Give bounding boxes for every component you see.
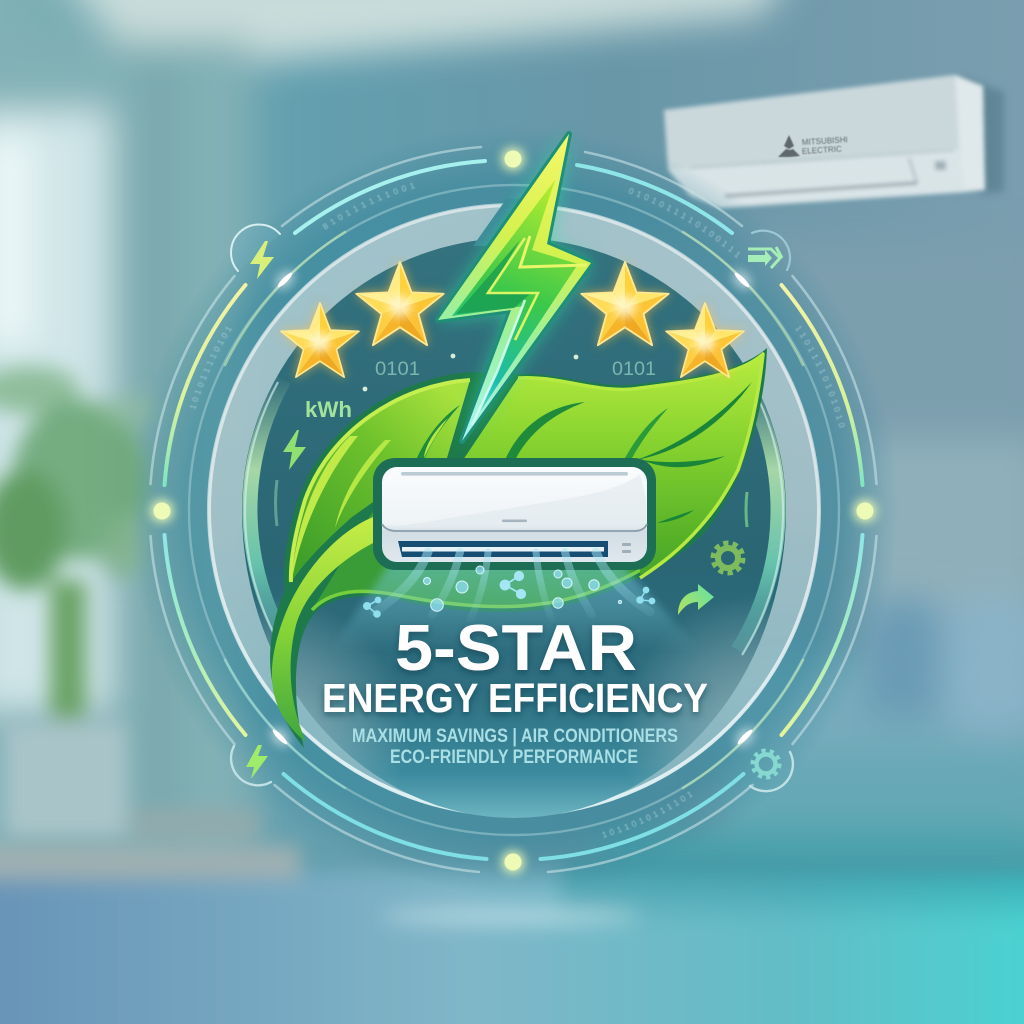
icon: curved arrow — [678, 584, 714, 615]
air vent — [398, 541, 608, 557]
lightning bolt — [438, 134, 591, 441]
HUD outer arcs — [150, 147, 876, 872]
badge: arrows top right — [748, 231, 790, 270]
icon: molecule center — [500, 572, 525, 598]
outer thin arcs — [150, 147, 876, 872]
circular tint behind HUD rings — [129, 125, 899, 895]
binary labels — [375, 359, 656, 380]
five-point gold stars — [281, 262, 744, 377]
notch in glass ring behind bolt — [473, 198, 557, 246]
water bubbles — [424, 566, 622, 611]
binary labels: 0101 — [612, 359, 656, 380]
ring sparkles — [271, 271, 754, 746]
background floor — [0, 845, 1024, 1024]
brand logo: MITSUBISHI — [802, 134, 848, 147]
heading: energy efficiency: ENERGY EFFICIENCY — [322, 675, 708, 721]
binary labels: 0101 — [375, 359, 420, 380]
control buttons — [622, 543, 631, 546]
subtitle line two: ECO-FRIENDLY PERFORMANCE — [390, 747, 638, 768]
title: 5-STAR: 5-STAR — [395, 611, 637, 684]
icon: gear — [713, 543, 743, 573]
left leaf lobe — [291, 380, 470, 582]
subtitle line one: MAXIMUM SAVINGS | AIR CONDITIONERS — [352, 726, 678, 747]
background sofa — [600, 600, 1024, 870]
icon: molecule left — [364, 597, 381, 617]
tiny binary text along rings: 1 1 0 1 1 1 1 0 1 0 1 0 1 0 — [795, 326, 845, 428]
kWh label: kWh — [305, 397, 352, 422]
glass ring — [208, 204, 820, 816]
curved leaf stem — [272, 517, 375, 742]
icon: small lightning — [283, 430, 306, 470]
badge: gear bottom right — [750, 750, 793, 791]
tiny binary text along rings: 1 0 1 0 1 1 1 1 0 1 0 1 — [190, 326, 232, 410]
glowing node dots — [154, 150, 874, 870]
thin inner ring — [189, 185, 839, 835]
bright cyan and lime arcs — [164, 161, 862, 859]
tiny binary text along rings: 8 1 0 1 1 1 1 1 1 0 0 1 — [322, 182, 415, 230]
wall-mounted air conditioner with brand logo — [664, 75, 1004, 208]
small floating dots — [363, 354, 578, 391]
brand logo — [778, 134, 848, 157]
icon: molecule right — [637, 587, 655, 604]
tiny binary text along rings — [190, 182, 845, 838]
tiny binary text along rings: 1 0 1 1 0 1 0 1 1 1 1 0 1 — [602, 792, 693, 838]
cool air fan glow — [330, 552, 700, 650]
cool air flow streams — [375, 552, 650, 620]
title block — [322, 611, 708, 768]
bright ring segments near sparkles — [225, 232, 803, 788]
badge: lightning bottom left — [231, 745, 271, 785]
brand logo: ELECTRIC — [802, 144, 842, 156]
inner dark disc — [242, 240, 786, 818]
inner glass side bands — [245, 380, 783, 655]
background potted plant — [0, 366, 260, 838]
leaf veins — [292, 382, 752, 580]
leaf dark backing — [270, 348, 767, 748]
lower leaf band — [312, 470, 700, 610]
air conditioner hero unit — [373, 458, 656, 570]
tiny binary text along rings: 0 1 0 1 0 1 1 1 1 0 1 0 0 1 1 1 — [628, 188, 740, 258]
badge: lightning top left — [231, 225, 280, 279]
main leaf blade — [463, 354, 763, 575]
leaf illustration — [270, 348, 767, 748]
